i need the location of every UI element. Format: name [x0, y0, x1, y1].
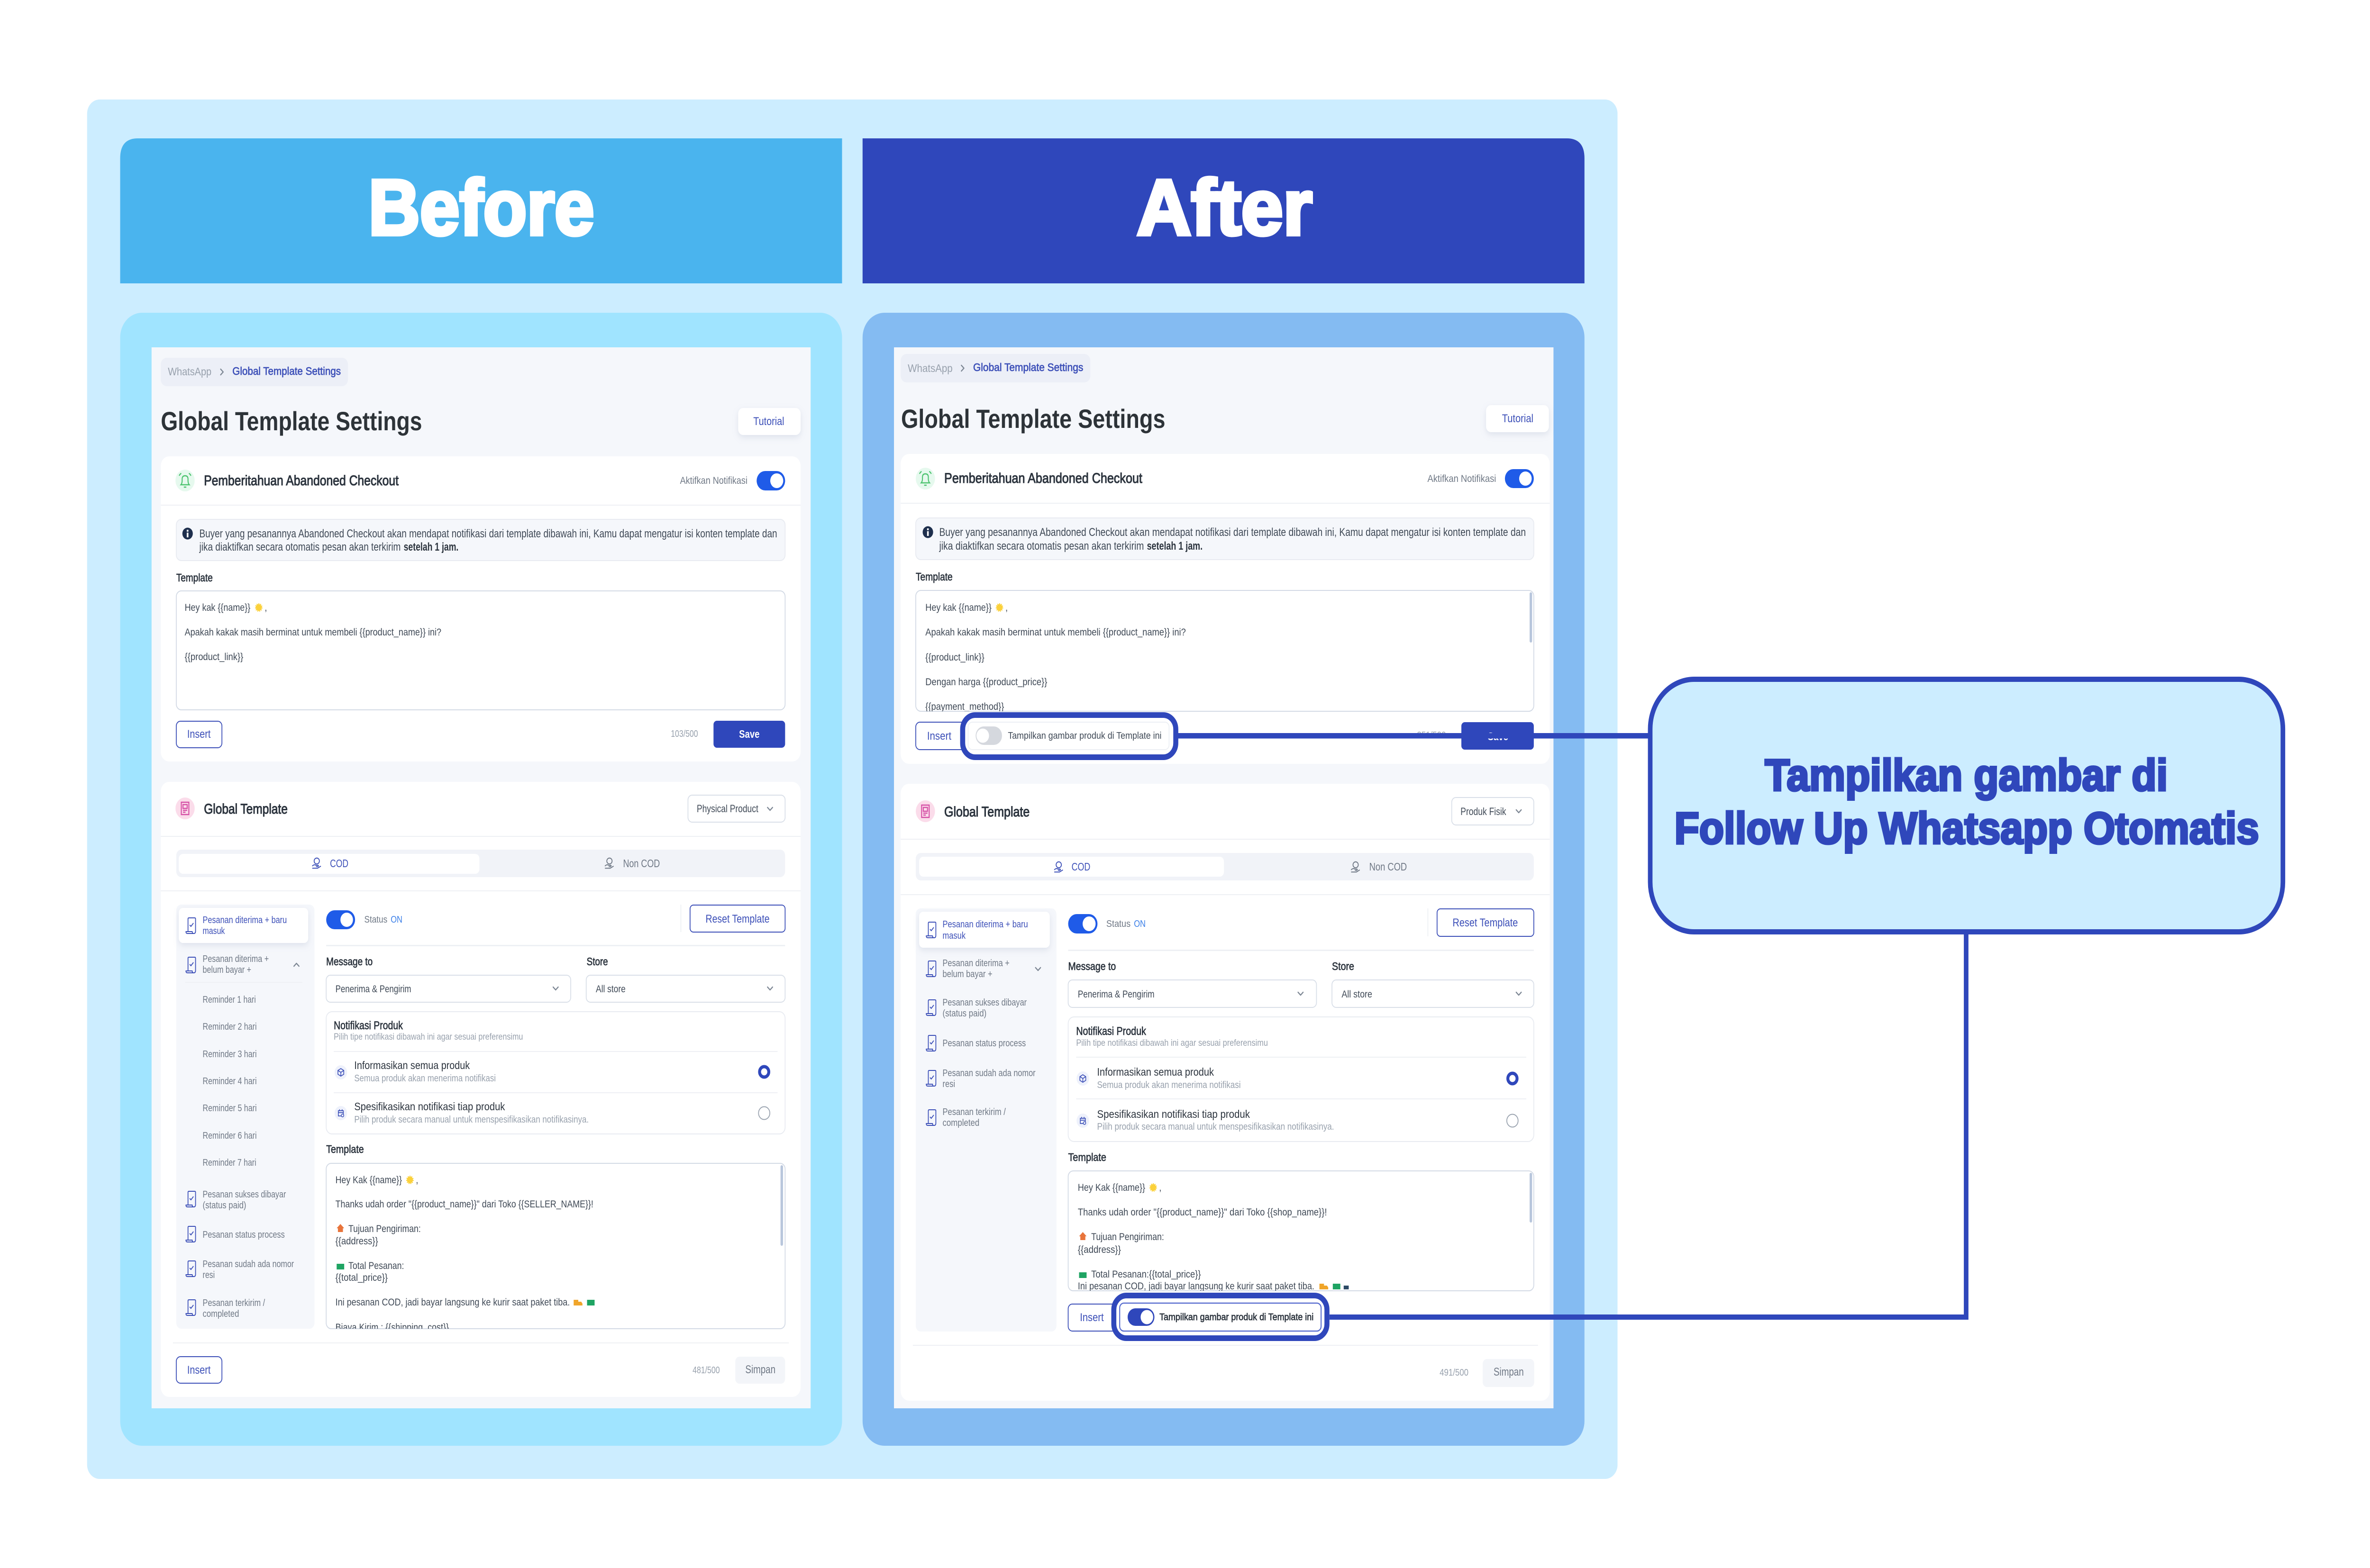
item: awaiting payment: Pesanan diterima + — [943, 958, 1010, 968]
item: process — [186, 1226, 285, 1242]
character counter: 491/500 — [1440, 1367, 1468, 1378]
template message textarea — [326, 1163, 785, 1333]
breadcrumb — [161, 358, 348, 386]
product notification options: Semua produk akan menerima notifikasi — [354, 1073, 496, 1083]
icon: box — [335, 1065, 347, 1079]
insert button — [916, 722, 966, 750]
product notification options — [1068, 1017, 1534, 1142]
radio selected — [759, 1067, 769, 1077]
template textarea: Hey kak {{name}} — [185, 602, 251, 613]
item: awaiting payment: belum bayar + — [943, 969, 993, 979]
template textarea: Hey kak {{name}} — [925, 602, 992, 613]
template textarea: , — [1005, 602, 1008, 613]
template textarea: , — [264, 602, 267, 613]
COD tabs: COD — [330, 857, 348, 870]
template message textarea: Ini pesanan COD, jadi bayar langsung ke kurir saat paket tiba. — [1078, 1281, 1314, 1292]
item: process: Pesanan status process — [203, 1229, 285, 1240]
callout: show image in automatic WhatsApp follow up — [1650, 680, 2283, 932]
tutorial button: Tutorial — [1502, 412, 1533, 425]
template label: Template — [1068, 1151, 1106, 1163]
info notice: Buyer yang pesanannya Abandoned Checkout akan mendapat notifikasi dari template dibawah ini, Kamu dapat mengatur isi konten template dan — [939, 526, 1526, 538]
template message textarea: Hey Kak {{name}} — [336, 1175, 402, 1186]
message to field — [1068, 960, 1316, 1007]
item: process — [926, 1035, 1026, 1051]
arrow: elbow connector from enabled toggle to callout — [1330, 932, 1966, 1317]
expanded item with reminders: Reminder 3 hari — [203, 1049, 257, 1059]
item: paid — [926, 997, 1027, 1018]
template message textarea: {{total_price}} — [336, 1272, 388, 1283]
character counter: 481/500 — [693, 1365, 720, 1375]
reset template button — [690, 905, 785, 932]
item: paid: (status paid) — [203, 1200, 246, 1210]
icon: sun — [996, 604, 1003, 611]
status toggle: ON — [391, 914, 402, 924]
info notice: setelah 1 jam. — [1147, 540, 1203, 552]
sidebar: order status list — [916, 908, 1057, 1332]
product notification options: Spesifikasikan notifikasi tiap produk — [1097, 1108, 1250, 1120]
card: Pemberitahuan Abandoned Checkout — [161, 456, 801, 761]
tutorial button: Tutorial — [753, 415, 784, 427]
insert button — [1068, 1304, 1119, 1331]
insert button: Insert — [927, 730, 952, 742]
icon: bell — [175, 470, 195, 491]
save button: Simpan — [735, 1357, 785, 1384]
card heading: Pemberitahuan Abandoned Checkout — [204, 472, 399, 488]
active item — [179, 908, 308, 943]
message to field — [326, 955, 571, 1002]
save button: Save — [1488, 730, 1508, 743]
message to field: Penerima & Pengirim — [336, 984, 411, 995]
card: Global Template — [161, 782, 801, 1397]
page title: Global Template Settings — [901, 404, 1165, 434]
icon: Non COD — [605, 858, 614, 868]
item: completed: Pesanan terkirim / — [943, 1106, 1006, 1117]
info notice: Buyer yang pesanannya Abandoned Checkout akan mendapat notifikasi dari template dibawah ini, Kamu dapat mengatur isi konten template dan — [199, 527, 777, 540]
template textarea: Apakah kakak masih berminat untuk membeli {{product_name}} ini? — [925, 627, 1186, 638]
product notification options: Notifikasi Produk — [334, 1019, 403, 1032]
product notification options — [326, 1012, 785, 1134]
icon: bell — [916, 468, 935, 489]
item: paid — [186, 1189, 286, 1210]
save button: Simpan: Simpan — [1494, 1366, 1524, 1378]
message to field: Message to — [326, 955, 373, 968]
icon: info — [923, 526, 933, 538]
item: paid: Pesanan sukses dibayar — [943, 997, 1027, 1007]
icon: template — [916, 800, 935, 822]
card: Pemberitahuan Abandoned Checkout — [901, 454, 1550, 764]
highlight: product image toggle off — [963, 715, 1176, 757]
COD tabs: Non COD — [623, 857, 660, 870]
save button: Simpan — [1483, 1359, 1534, 1387]
insert button — [176, 721, 222, 748]
status toggle: Status — [1106, 918, 1130, 929]
insert button — [176, 1357, 222, 1383]
icon: calendar search — [335, 1106, 347, 1120]
template message textarea: , — [416, 1175, 418, 1186]
store field — [1332, 960, 1534, 1007]
after screenshot: Global Template Settings page — [894, 347, 1650, 1408]
before screenshot: Global Template Settings page — [152, 347, 811, 1408]
template message textarea: {{address}} — [336, 1236, 378, 1247]
notification toggle — [1427, 469, 1534, 488]
template label: Template — [916, 571, 953, 583]
radio unselected — [758, 1107, 770, 1119]
expanded item with reminders: Reminder 1 hari — [203, 994, 256, 1005]
template message textarea: Hey Kak {{name}} — [1078, 1182, 1145, 1193]
icon: box — [1076, 1071, 1089, 1086]
template message textarea: Thanks udah order "{{product_name}}" dari Toko {{SELLER_NAME}}! — [336, 1199, 593, 1210]
COD tabs: COD — [1072, 861, 1090, 873]
insert button: Insert — [187, 728, 211, 740]
expanded item with reminders: Reminder 4 hari — [203, 1076, 257, 1086]
highlight: product image toggle off: Tampilkan gambar produk di Template ini — [1008, 730, 1162, 741]
expanded item with reminders: Reminder 7 hari — [203, 1157, 256, 1168]
template label: Template — [176, 571, 213, 584]
template message textarea: Biaya Kirim : {{shipping_cost}} — [336, 1322, 449, 1333]
icon: info — [182, 528, 193, 539]
item: completed — [926, 1106, 1006, 1128]
breadcrumb: Global Template Settings — [973, 361, 1083, 373]
template textarea: {{product_link}} — [185, 652, 244, 662]
product notification options: Notifikasi Produk — [1076, 1025, 1146, 1037]
template message textarea: Total Pesanan:{{total_price}} — [1091, 1269, 1201, 1280]
active item: masuk — [203, 925, 225, 936]
template label: Template — [326, 1143, 364, 1155]
card heading: Global Template — [204, 800, 288, 816]
icon: sun — [256, 604, 262, 611]
icon: COD — [312, 858, 321, 868]
before column header — [120, 138, 842, 283]
template message textarea: , — [1159, 1182, 1161, 1193]
callout: show image in automatic WhatsApp follow up: Tampilkan gambar di — [1765, 750, 2168, 800]
card heading: Global Template — [944, 803, 1030, 819]
item: receipt number: Pesanan sudah ada nomor — [203, 1259, 294, 1269]
template message textarea: {{address}} — [1078, 1244, 1121, 1255]
callout: show image in automatic WhatsApp follow up: Follow Up Whatsapp Otomatis — [1675, 803, 2259, 853]
template textarea — [916, 590, 1534, 712]
icon: COD — [1054, 862, 1063, 872]
active item: Pesanan diterima + baru — [943, 919, 1028, 929]
expanded item with reminders: Reminder 2 hari — [203, 1021, 257, 1032]
breadcrumb: WhatsApp — [168, 365, 211, 378]
product notification options: Informasikan semua produk — [354, 1059, 470, 1071]
store field: Store — [1332, 960, 1354, 972]
page title: Global Template Settings — [161, 407, 422, 436]
product type dropdown — [1452, 798, 1534, 825]
template message textarea: Ini pesanan COD, jadi bayar langsung ke kurir saat paket tiba. — [336, 1297, 570, 1308]
item: process: Pesanan status process — [943, 1038, 1026, 1048]
product notification options: Pilih tipe notifikasi dibawah ini agar sesuai preferensimu — [334, 1032, 523, 1042]
notification toggle: Aktifkan Notifikasi — [680, 475, 747, 486]
store field: All store — [1341, 989, 1372, 1000]
icon: Non COD — [1351, 862, 1360, 872]
info notice: jika diaktifkan secara otomatis pesan akan terkirim — [199, 541, 401, 553]
item: completed — [186, 1297, 265, 1319]
store field — [586, 955, 785, 1002]
icon: calendar search — [1076, 1114, 1089, 1128]
save button — [713, 721, 785, 748]
store field: Store — [587, 955, 608, 968]
item: completed: completed — [203, 1308, 239, 1319]
icon: template — [175, 798, 195, 819]
highlight: product image toggle on: Tampilkan gambar produk di Template ini — [1159, 1312, 1313, 1322]
breadcrumb — [901, 354, 1090, 382]
save button: Simpan: Simpan — [745, 1363, 775, 1376]
item: completed: completed — [943, 1117, 979, 1128]
outer comparison panel — [87, 100, 1618, 1479]
after panel background — [863, 313, 1585, 1446]
card: Global Template — [901, 784, 1550, 1401]
product notification options: Informasikan semua produk — [1097, 1066, 1214, 1078]
reset template button: Reset Template — [706, 913, 770, 925]
active item: masuk — [943, 930, 966, 941]
COD tabs — [916, 853, 1534, 880]
item: paid: (status paid) — [943, 1008, 986, 1018]
product type dropdown — [688, 795, 785, 822]
tutorial button — [1486, 405, 1549, 432]
notification toggle — [680, 471, 785, 490]
save button — [1461, 722, 1534, 750]
before panel background — [120, 313, 842, 1446]
store field: All store — [596, 984, 626, 995]
status toggle: Status — [365, 914, 387, 924]
item: receipt number: resi — [203, 1269, 215, 1280]
character counter: 103/500 — [671, 728, 698, 739]
after column header — [863, 138, 1585, 283]
product type dropdown: Produk Fisik — [1460, 806, 1506, 817]
expanded item with reminders: Reminder 6 hari — [203, 1130, 257, 1141]
reset template button: Reset Template — [1452, 916, 1518, 929]
product notification options: Semua produk akan menerima notifikasi — [1097, 1079, 1240, 1090]
breadcrumb: Global Template Settings — [232, 365, 341, 377]
radio selected — [1508, 1073, 1517, 1084]
template message textarea: Tujuan Pengiriman: — [1091, 1232, 1164, 1242]
expanded item with reminders: Pesanan diterima + — [203, 953, 269, 964]
product notification options: Pilih produk secara manual untuk menspesifikasikan notifikasinya. — [1097, 1121, 1334, 1132]
highlight: product image toggle on — [1114, 1296, 1327, 1338]
item: receipt number — [186, 1259, 294, 1280]
item: receipt number — [926, 1068, 1036, 1089]
template message textarea — [1068, 1171, 1534, 1292]
character counter: 251/500 — [1417, 730, 1446, 740]
connector: top highlight to callout — [1177, 733, 1650, 738]
insert button: Insert — [1080, 1311, 1104, 1323]
product type dropdown: Physical Product — [697, 803, 758, 815]
item: awaiting payment — [926, 958, 1040, 979]
save button: Save — [739, 728, 759, 740]
card heading: Pemberitahuan Abandoned Checkout — [944, 470, 1142, 486]
status toggle — [326, 910, 402, 929]
COD tabs — [176, 850, 785, 877]
insert button: Insert — [187, 1364, 211, 1376]
heading: Before: Before — [368, 164, 594, 252]
item: completed: Pesanan terkirim / — [203, 1297, 265, 1308]
tutorial button — [738, 408, 801, 435]
breadcrumb: WhatsApp — [908, 362, 953, 374]
item: receipt number: Pesanan sudah ada nomor — [943, 1068, 1036, 1078]
expanded item with reminders — [185, 953, 302, 1168]
message to field: Message to — [1068, 960, 1116, 972]
expanded item with reminders: belum bayar + — [203, 964, 251, 975]
info notice — [916, 518, 1534, 560]
item: receipt number: resi — [943, 1079, 955, 1089]
status toggle: ON — [1134, 918, 1146, 929]
sidebar: order status list — [176, 905, 314, 1329]
template message textarea: Thanks udah order "{{product_name}}" dari Toko {{shop_name}}! — [1078, 1207, 1327, 1218]
heading: After: After — [1137, 164, 1313, 252]
active item — [919, 912, 1050, 948]
reset template button — [1437, 909, 1534, 936]
notification toggle: Aktifkan Notifikasi — [1427, 473, 1496, 484]
product notification options: Pilih tipe notifikasi dibawah ini agar sesuai preferensimu — [1076, 1038, 1268, 1048]
template textarea: Dengan harga {{product_price}} — [925, 677, 1048, 688]
info notice — [176, 519, 785, 561]
message to field: Penerima & Pengirim — [1078, 989, 1155, 1000]
item: paid: Pesanan sukses dibayar — [203, 1189, 286, 1199]
template message textarea: Tujuan Pengiriman: — [348, 1224, 421, 1234]
active item: Pesanan diterima + baru — [203, 915, 287, 925]
info notice: setelah 1 jam. — [404, 541, 458, 553]
template textarea: {{payment_method}} — [925, 701, 1004, 712]
status toggle — [1068, 914, 1146, 934]
template textarea: Apakah kakak masih berminat untuk membeli {{product_name}} ini? — [185, 627, 441, 638]
radio unselected — [1507, 1115, 1518, 1127]
product notification options: Spesifikasikan notifikasi tiap produk — [354, 1100, 505, 1113]
COD tabs: Non COD — [1369, 861, 1407, 873]
info notice: jika diaktifkan secara otomatis pesan akan terkirim — [939, 540, 1144, 552]
template textarea — [176, 591, 785, 710]
product notification options: Pilih produk secara manual untuk menspesifikasikan notifikasinya. — [354, 1114, 589, 1124]
template textarea: {{product_link}} — [925, 652, 984, 663]
expanded item with reminders: Reminder 5 hari — [203, 1103, 257, 1113]
template message textarea: Total Pesanan: — [348, 1260, 404, 1271]
